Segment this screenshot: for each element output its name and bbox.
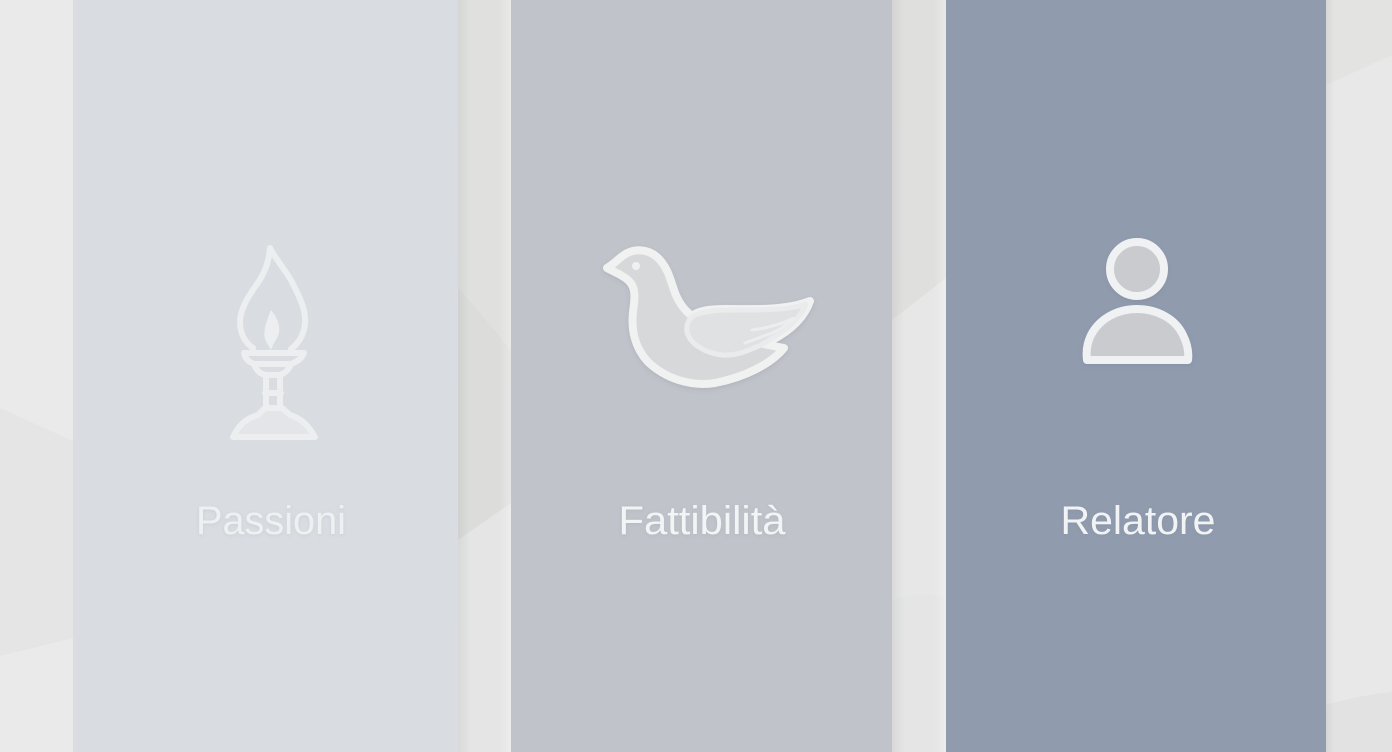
shoulders bbox=[1087, 309, 1188, 360]
cup bbox=[244, 353, 304, 375]
panel: Relatore bbox=[946, 0, 1326, 752]
panel 2 background bbox=[511, 0, 892, 752]
base bbox=[233, 408, 315, 437]
wing feathers bbox=[745, 318, 794, 343]
stem bbox=[265, 376, 281, 408]
eye bbox=[632, 262, 640, 270]
icon: oil lamp with flame bbox=[233, 248, 315, 437]
panel shadows bbox=[458, 0, 1334, 752]
inner flame bbox=[265, 311, 279, 349]
flame outline bbox=[240, 248, 305, 349]
wing bbox=[687, 304, 806, 355]
icon: dove bbox=[607, 250, 810, 384]
panel: Passioni bbox=[73, 0, 458, 752]
head bbox=[1110, 242, 1164, 296]
label: Relatore: Relatore bbox=[1060, 499, 1216, 543]
panel: Fattibilità bbox=[511, 0, 892, 752]
panel 3 background bbox=[946, 0, 1326, 752]
icon: person bbox=[1087, 242, 1188, 360]
label: Passioni: Passioni bbox=[196, 499, 346, 543]
panel 1 background bbox=[73, 0, 458, 752]
label: Fattibilità: Fattibilità bbox=[618, 499, 786, 543]
